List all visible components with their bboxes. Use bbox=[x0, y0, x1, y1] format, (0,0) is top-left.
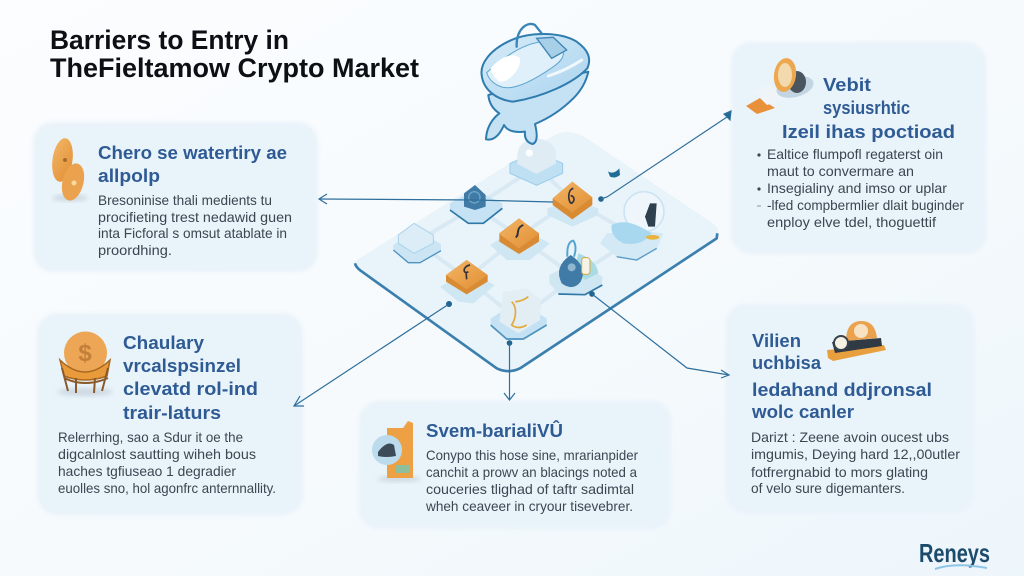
node: orange centre bbox=[490, 218, 550, 260]
icon: coin in nest: $ bbox=[78, 340, 92, 367]
node: money bag bbox=[549, 241, 603, 295]
heading: Chero se watertiry ae bbox=[98, 142, 287, 163]
text block: of velo sure digemanters. bbox=[751, 480, 905, 496]
bullet list bbox=[757, 146, 964, 230]
heading bbox=[782, 74, 955, 142]
heading: clevatd rol-ind bbox=[123, 378, 258, 399]
text block bbox=[98, 192, 292, 258]
text block: wheh ceaveer in cryour tisevebrer. bbox=[425, 498, 633, 514]
arrow: to lower right panel bbox=[589, 291, 729, 378]
heading bbox=[751, 330, 932, 422]
node: globe and figure bbox=[600, 192, 664, 261]
text block bbox=[58, 429, 276, 496]
heading: allpolp bbox=[98, 165, 160, 186]
heading: ledahand ddjronsal bbox=[752, 379, 932, 400]
title: Barriers to Entry in bbox=[50, 25, 289, 55]
text block: proordhing. bbox=[98, 242, 172, 258]
text block: haches tgfiuseao 1 degradier bbox=[58, 463, 236, 479]
text block: imgumis, Deying hard 12,,00utler bbox=[751, 446, 960, 462]
bullet list: enploy elve tdel, thoguettif bbox=[767, 214, 936, 230]
heading: Vilien bbox=[752, 330, 801, 351]
icon: glossy mouse-shaped cloud bbox=[481, 24, 589, 144]
icon: coin in nest bbox=[57, 332, 113, 396]
arrow: to top left panel bbox=[319, 194, 553, 204]
icon: coin on tray bbox=[746, 57, 816, 114]
text block: inta Ficforal s omsut atablate in bbox=[98, 225, 287, 241]
icon: orange document with badge bbox=[372, 421, 421, 482]
text block: canchit a prowv an blacings noted a bbox=[426, 464, 637, 480]
title bbox=[50, 25, 419, 83]
icon: orange tokens bbox=[50, 137, 88, 203]
text block: Darizt : Zeene avoin oucest ubs bbox=[751, 429, 949, 445]
arrow: to lower left panel bbox=[294, 301, 452, 406]
title: TheFieltamow Crypto Market bbox=[50, 53, 419, 83]
heading: sysiusrhtic bbox=[823, 97, 910, 118]
central isometric platform illustration bbox=[355, 24, 718, 371]
panel: top right bbox=[731, 42, 986, 254]
platform bbox=[355, 132, 718, 371]
heading bbox=[98, 142, 287, 186]
text block bbox=[751, 429, 960, 496]
heading: wolc canler bbox=[751, 401, 854, 422]
text block: digcalnlost sautting wiheh bous bbox=[58, 446, 256, 462]
panel: lower right bbox=[726, 304, 974, 513]
small dark marker bbox=[608, 168, 620, 178]
bullet list: Insegialiny and imso or uplar bbox=[767, 180, 947, 196]
text block: Relerrhing, sao a Sdur it oe the bbox=[58, 429, 243, 445]
text block: fotfrergnabid to mors glating bbox=[751, 464, 928, 480]
text block: Bresoninise thali medients tu bbox=[98, 192, 272, 208]
node: orange left bbox=[440, 260, 495, 303]
arrow: to bottom centre panel bbox=[504, 340, 515, 400]
heading: uchbisa bbox=[752, 352, 822, 373]
bullet list: -lfed compbermlier dlait buginder bbox=[767, 197, 964, 213]
heading bbox=[123, 332, 258, 423]
heading: Chaulary bbox=[123, 332, 205, 353]
node: bottom glass with gold symbol bbox=[491, 288, 547, 340]
text block bbox=[425, 447, 638, 514]
text block: Conypo this hose sine, mrarianpider bbox=[426, 447, 638, 463]
bullet list: Ealtice flumpofl regaterst oin bbox=[767, 146, 943, 162]
panel: bottom centre bbox=[359, 401, 671, 529]
icon: orange device bbox=[827, 321, 886, 361]
text block: euolles sno, hol agonfrc anternnallity. bbox=[58, 480, 276, 496]
network connectors bbox=[417, 167, 637, 320]
node: glass top bbox=[510, 138, 563, 185]
heading: vrcalspsinzel bbox=[123, 355, 241, 376]
node: orange top right bbox=[547, 182, 598, 227]
node: blue coin bbox=[450, 185, 502, 224]
arrow: to top right panel bbox=[598, 111, 731, 202]
panel: lower left bbox=[37, 313, 303, 515]
heading: Izeil ihas poctioad bbox=[782, 121, 955, 142]
logo: Reneys bbox=[919, 538, 990, 568]
text block: couceries tlighad of taftr sadimtal bbox=[426, 481, 634, 497]
panel: top left bbox=[33, 122, 318, 272]
heading: Vebit bbox=[823, 74, 871, 95]
bullet list: maut to convermare an bbox=[767, 163, 914, 179]
text block: procifieting trest nedawid guen bbox=[98, 209, 292, 225]
heading: trair-laturs bbox=[123, 402, 221, 423]
node: ice cube left bbox=[393, 223, 441, 263]
heading: Svem-barialiVÛ bbox=[426, 420, 563, 441]
